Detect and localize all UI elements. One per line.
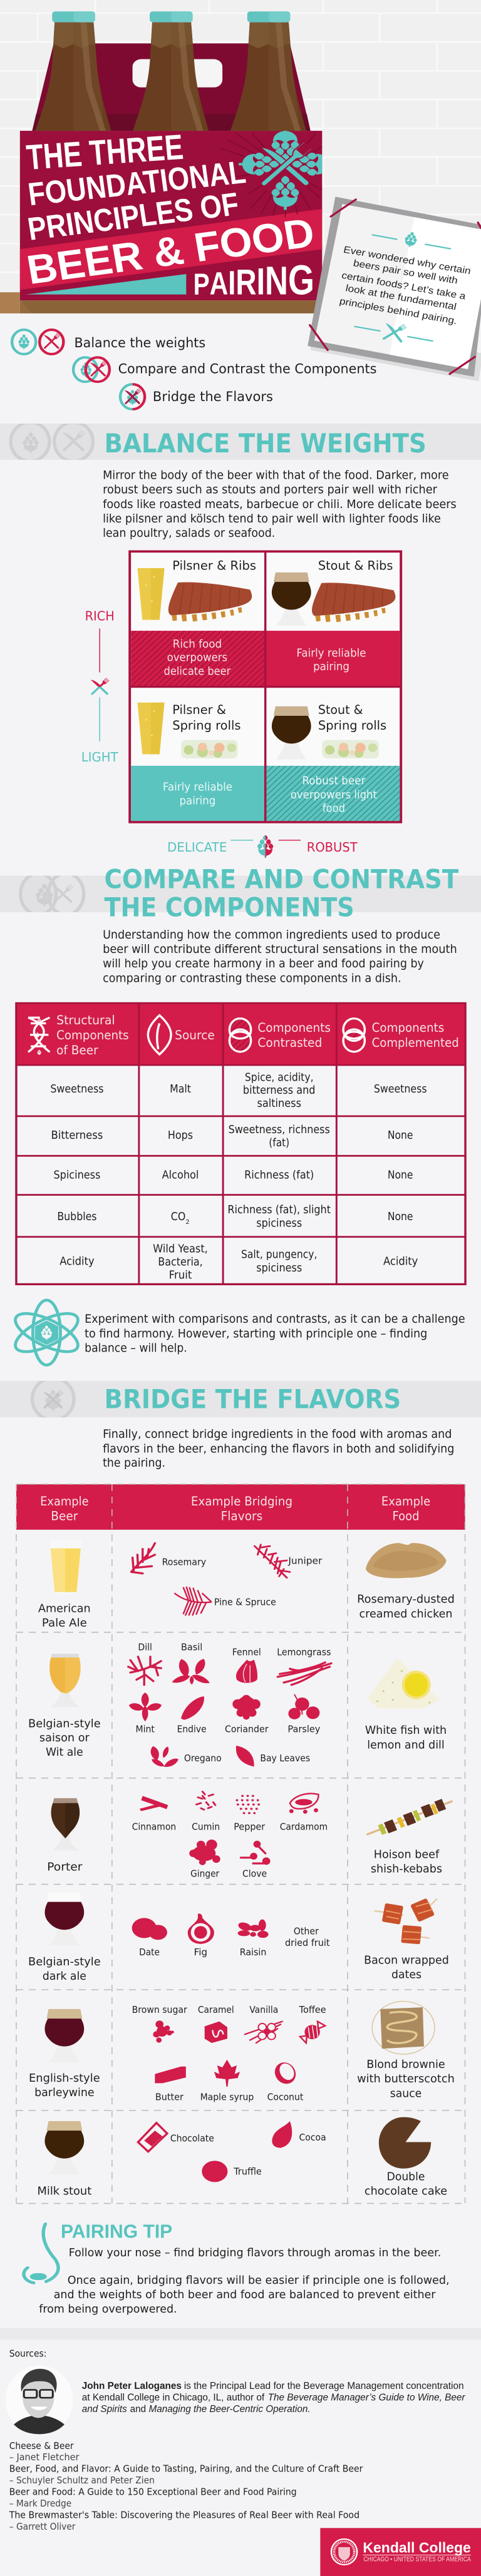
- row: porter: Clove: [242, 1868, 267, 1880]
- row: english barleywine: with butterscotch: [357, 2073, 455, 2085]
- experiment note with atom icon: to find harmony. However, starting with principle one – finding: [85, 1326, 427, 1340]
- row: porter: Porter: [47, 1861, 83, 1873]
- flavors table: [16, 1484, 465, 2204]
- row: acidity: spiciness: [256, 1261, 302, 1275]
- source list: The Brewmaster's Table: Discovering the Pleasures of Real Beer with Real Food: [9, 2509, 359, 2520]
- row: bubbles: [57, 1204, 413, 1229]
- row: bubbles: CO: [171, 1211, 185, 1223]
- row: belgian dark ale: dark ale: [43, 1970, 86, 1983]
- row: milk stout: chocolate cake: [365, 2184, 447, 2197]
- icon: pine and spruce: [175, 1587, 211, 1615]
- table header: Components: [372, 1021, 444, 1035]
- row: bitterness: (fat): [269, 1137, 289, 1149]
- row: belgian saison: Basil: [181, 1642, 202, 1653]
- row: belgian saison: Endive: [177, 1724, 207, 1734]
- icon: mint: [128, 1693, 162, 1721]
- icon: cumin: [196, 1791, 215, 1810]
- icon: oregano: [149, 1745, 180, 1769]
- cell: pilsner and spring rolls: Pilsner &: [172, 703, 226, 717]
- row: belgian dark ale: Other: [294, 1926, 319, 1937]
- principle list: [12, 330, 376, 409]
- heading band: BALANCE THE WEIGHTS: [105, 428, 427, 459]
- table header: Example: [381, 1494, 430, 1509]
- icon: rosemary: [132, 1543, 155, 1574]
- row: bubbles: 2: [185, 1218, 190, 1226]
- glass: pint: [50, 1540, 81, 1594]
- row: belgian saison: Dill: [138, 1642, 152, 1653]
- row: acidity: Salt, pungency,: [241, 1248, 317, 1261]
- cell: stout and ribs: Fairly reliable: [296, 647, 366, 659]
- row: bitterness: Hops: [168, 1129, 193, 1142]
- row: belgian dark ale: [28, 1892, 449, 1983]
- glass: porter tulip: [51, 1798, 80, 1850]
- row: milk stout: Cocoa: [299, 2132, 326, 2143]
- title: BEER & FOOD: [24, 209, 318, 293]
- food: white fish with lemon: [368, 1658, 439, 1708]
- icon: basil: [171, 1657, 211, 1686]
- row: porter: Ginger: [190, 1868, 220, 1880]
- icon: atom: [9, 1300, 84, 1365]
- intro paragraph: robust beers such as stouts and porters pair well with richer: [103, 482, 437, 496]
- row: belgian saison: Coriander: [225, 1724, 269, 1734]
- icon: cardamom: [289, 1793, 318, 1814]
- row: bubbles: spiciness: [256, 1217, 302, 1229]
- row: spiciness: [53, 1169, 413, 1181]
- experiment note with atom icon: balance – will help.: [85, 1341, 187, 1355]
- cell: pilsner and spring rolls: pairing: [180, 795, 215, 807]
- table header: Structural: [56, 1013, 115, 1027]
- source list: – Garrett Oliver: [9, 2520, 76, 2532]
- icon: dna helix: [28, 1017, 49, 1055]
- section 2: compare and contrast: [0, 864, 481, 1284]
- glass: milk stout snifter: [44, 2121, 84, 2174]
- row: bitterness: None: [388, 1129, 413, 1142]
- row: belgian saison: Lemongrass: [277, 1647, 331, 1657]
- footer: [0, 2221, 481, 2576]
- row: spiciness: Alcohol: [162, 1169, 199, 1181]
- source list: – Janet Fletcher: [9, 2451, 79, 2463]
- row: spiciness: Richness (fat): [244, 1169, 314, 1181]
- brick wall: [0, 0, 481, 313]
- row: sweetness: Sweetness: [374, 1083, 427, 1096]
- food: blond brownie: [372, 2002, 435, 2054]
- icon: caramel cube: [205, 2022, 227, 2043]
- icon: coconut: [271, 2059, 299, 2087]
- row: american pale ale: Pale Ale: [42, 1617, 87, 1629]
- icon: brown sugar: [153, 2020, 174, 2043]
- icon: malt grain: [148, 1016, 171, 1054]
- row: english barleywine: Toffee: [299, 2004, 326, 2015]
- intro paragraph: will help you create harmony in a beer and food pairing by: [103, 957, 424, 970]
- row: belgian dark ale: Date: [139, 1947, 160, 1958]
- icon: butter: [155, 2067, 186, 2083]
- row: english barleywine: Coconut: [267, 2092, 303, 2102]
- row: acidity: Acidity: [383, 1255, 418, 1268]
- cell: pilsner and spring rolls: Fairly reliable: [163, 781, 232, 793]
- row: porter: Cardamom: [280, 1821, 328, 1832]
- icon: parsley: [288, 1694, 319, 1719]
- rich axis: RICH: [85, 609, 115, 623]
- intro paragraph: Understanding how the common ingredients used to produce: [103, 928, 440, 942]
- intro paragraph: like pilsner and kölsch tend to pair well with lighter foods like: [103, 512, 441, 526]
- row: sweetness: Sweetness: [50, 1083, 104, 1096]
- author bio: Managing the Beer-Centric Operation.: [149, 2403, 311, 2415]
- icon: maple leaf: [214, 2060, 240, 2087]
- cell: stout and spring rolls: Stout &: [318, 703, 363, 717]
- pairing matrix: [130, 551, 401, 822]
- intro paragraph: [103, 468, 457, 540]
- title: THE THREE: [25, 127, 185, 177]
- row: porter: Cinnamon: [132, 1821, 176, 1832]
- cell: stout and spring rolls: food: [323, 802, 345, 815]
- pinned note card: [308, 196, 481, 381]
- row: belgian saison: Parsley: [287, 1724, 320, 1734]
- cell: stout and spring rolls: overpowers light: [291, 788, 377, 802]
- table header: Example Bridging: [191, 1494, 292, 1509]
- row: milk stout: Truffle: [233, 2166, 262, 2177]
- principle 2: compare and contrast: Compare and Contrast the Components: [118, 362, 376, 377]
- row: belgian dark ale: Raisin: [240, 1947, 266, 1958]
- cell: stout and spring rolls: Spring rolls: [318, 719, 386, 733]
- title: PRINCIPLES OF: [25, 186, 241, 247]
- row: american pale ale: Rosemary-dusted: [357, 1593, 455, 1606]
- row: english barleywine: Vanilla: [249, 2004, 278, 2015]
- author portrait: [6, 2366, 73, 2435]
- row: porter: shish-kebabs: [371, 1863, 442, 1875]
- delicate to robust axis: ROBUST: [307, 840, 358, 855]
- section 3: bridge the flavors: [0, 1300, 481, 1470]
- pairing tip: from being overpowered.: [39, 2302, 177, 2315]
- row: belgian saison: Belgian-style: [28, 1718, 101, 1730]
- row: milk stout: Chocolate: [170, 2133, 214, 2144]
- row: american pale ale: American: [38, 1602, 91, 1615]
- title: PAIRING: [194, 257, 314, 304]
- icon: raisin: [237, 1920, 269, 1938]
- icon: cinnamon: [140, 1796, 168, 1811]
- principle 2: compare and contrast: [73, 357, 376, 382]
- source list: – Mark Dredge: [9, 2497, 71, 2509]
- cell: stout and ribs: pairing: [313, 661, 349, 673]
- row: sweetness: Spice, acidity,: [245, 1071, 314, 1084]
- pinned note card: principles behind pairing.: [338, 296, 458, 327]
- row: belgian saison: Bay Leaves: [260, 1753, 310, 1764]
- three beer bottles: [31, 11, 306, 131]
- row: acidity: Bacteria,: [158, 1256, 203, 1268]
- row: english barleywine: Blond brownie: [366, 2059, 445, 2071]
- icon: fennel: [236, 1659, 257, 1683]
- principle 1: balance: Balance the weights: [75, 335, 205, 351]
- table header: [17, 1004, 465, 1065]
- row: porter: Cumin: [192, 1821, 220, 1832]
- pinned note card: look at the fundamental: [344, 283, 457, 312]
- heading band: THE COMPONENTS: [105, 892, 354, 923]
- row: english barleywine: Brown sugar: [132, 2004, 187, 2015]
- food: bacon wrapped dates: [375, 1898, 437, 1944]
- row: acidity: Fruit: [169, 1269, 192, 1281]
- row: english barleywine: Maple syrup: [200, 2092, 254, 2102]
- cell: pilsner and ribs: Pilsner & Ribs: [172, 559, 256, 573]
- rich axis: LIGHT: [81, 750, 118, 765]
- carrier back with handle: [32, 43, 311, 131]
- divider band: [0, 2328, 481, 2339]
- table header: Beer: [51, 1509, 78, 1523]
- row: bitterness: [51, 1123, 413, 1149]
- title: [24, 127, 318, 304]
- source list: Beer, Food, and Flavor: A Guide to Tasting, Pairing, and the Culture of Craft Beer: [9, 2463, 363, 2474]
- row: spiciness: Spiciness: [53, 1169, 100, 1181]
- row: milk stout: Milk stout: [38, 2184, 91, 2197]
- table header: of Beer: [56, 1044, 98, 1057]
- heading band: [0, 868, 481, 917]
- cell: pilsner and ribs: [131, 559, 265, 686]
- intro paragraph: lean poultry, salads or seafood.: [103, 526, 275, 540]
- sources label: Sources:: [9, 2348, 46, 2359]
- kendall college logo: [320, 2528, 481, 2576]
- icon: chocolate: [138, 2123, 167, 2152]
- icon: dill: [128, 1657, 161, 1685]
- food: kebab: [366, 1799, 452, 1835]
- icon: date: [132, 1918, 167, 1940]
- heading band: [0, 422, 481, 461]
- row: american pale ale: Juniper: [287, 1555, 323, 1566]
- row: bubbles: Richness (fat), slight: [227, 1204, 331, 1216]
- table header: Contrasted: [257, 1036, 322, 1050]
- row: acidity: Acidity: [59, 1255, 95, 1268]
- icon: truffle: [202, 2161, 227, 2182]
- cell: pilsner and ribs: delicate beer: [164, 665, 231, 678]
- source list: Beer and Food: A Guide to 150 Exceptional Beer and Food Pairing: [9, 2486, 297, 2497]
- row: sweetness: Malt: [170, 1083, 191, 1096]
- author bio: [82, 2380, 466, 2415]
- source list: – Schuyler Schultz and Peter Zien: [9, 2474, 155, 2486]
- icon: contrasted circles: [229, 1019, 251, 1052]
- glass: barleywine snifter: [44, 2009, 84, 2062]
- table header: Food: [392, 1509, 420, 1523]
- row: american pale ale: Pine & Spruce: [214, 1597, 276, 1607]
- table header: Complemented: [372, 1036, 459, 1050]
- icon: pepper: [237, 1796, 262, 1813]
- principle 3: bridge: Bridge the Flavors: [153, 389, 273, 405]
- icon: bay leaf: [236, 1746, 254, 1766]
- icon: vanilla: [245, 2022, 282, 2043]
- intro paragraph: [103, 1427, 454, 1470]
- heading band: BRIDGE THE FLAVORS: [105, 1384, 401, 1415]
- row: bubbles: None: [388, 1211, 413, 1223]
- cell: stout and ribs: Stout & Ribs: [318, 559, 393, 573]
- row: belgian saison: saison or: [39, 1731, 90, 1744]
- cell: stout and spring rolls: Robust beer: [302, 775, 366, 788]
- row: english barleywine: Caramel: [198, 2004, 234, 2015]
- table header: Flavors: [221, 1509, 262, 1523]
- row: belgian saison: Fennel: [232, 1647, 261, 1657]
- row: acidity: Wild Yeast,: [153, 1243, 208, 1255]
- glass: tulip: [49, 1654, 81, 1707]
- row: american pale ale: [38, 1540, 455, 1629]
- section 1: balance the weights: [0, 422, 481, 858]
- icon: complemented circles: [343, 1019, 365, 1052]
- row: sweetness: saltiness: [257, 1097, 301, 1110]
- cell: pilsner and spring rolls: [131, 695, 265, 821]
- pinned note card: beers pair so well with: [352, 258, 458, 286]
- cell: pilsner and spring rolls: Spring rolls: [172, 719, 240, 733]
- row: belgian saison: White fish with: [365, 1724, 447, 1737]
- icon: nose: [24, 2224, 58, 2283]
- cell: pilsner and ribs: Rich food: [173, 638, 222, 651]
- row: english barleywine: barleywine: [34, 2087, 95, 2099]
- cell: pilsner and ribs: overpowers: [167, 651, 227, 664]
- cell: stout and spring rolls: [266, 703, 400, 821]
- row: american pale ale: Rosemary: [162, 1557, 206, 1568]
- row: belgian dark ale: dried fruit: [285, 1937, 330, 1948]
- glass: dark ale snifter: [44, 1892, 84, 1945]
- row: belgian dark ale: Fig: [194, 1947, 207, 1958]
- icon: clove: [240, 1841, 271, 1865]
- author bio: and Spirits: [82, 2403, 127, 2415]
- source list: [9, 2440, 363, 2532]
- icon: endive: [181, 1696, 204, 1720]
- row: belgian dark ale: dates: [391, 1968, 422, 1981]
- author bio: John Peter Laloganes: [82, 2380, 182, 2391]
- row: english barleywine: Butter: [155, 2092, 184, 2102]
- cell: stout and ribs: [266, 559, 400, 686]
- row: porter: Pepper: [234, 1821, 266, 1832]
- rich axis: [81, 609, 118, 765]
- food: chicken: [366, 1543, 447, 1578]
- source list: Cheese & Beer: [9, 2440, 74, 2451]
- table header: Components: [56, 1029, 129, 1042]
- icon: lemongrass: [277, 1662, 331, 1685]
- row: bitterness: Bitterness: [51, 1129, 103, 1142]
- intro paragraph: comparing or contrasting these components in a dish.: [103, 971, 401, 985]
- row: belgian saison: lemon and dill: [367, 1739, 445, 1751]
- pairing tip: [24, 2221, 450, 2315]
- delicate to robust axis: [167, 835, 358, 858]
- row: acidity: [59, 1243, 418, 1281]
- carrier front panel: [20, 131, 322, 300]
- row: english barleywine: English-style: [29, 2072, 100, 2085]
- food: double chocolate cake: [379, 2117, 431, 2169]
- row: belgian saison: Wit ale: [46, 1746, 83, 1759]
- row: belgian saison: Mint: [135, 1724, 155, 1734]
- pinned note card: certain foods? Let’s take a: [341, 270, 467, 302]
- row: english barleywine: sauce: [390, 2087, 422, 2100]
- row: american pale ale: creamed chicken: [359, 1607, 452, 1621]
- row: bubbles: Bubbles: [57, 1211, 97, 1223]
- heading band: [0, 1381, 481, 1418]
- row: porter: [47, 1791, 452, 1880]
- icon: juniper: [255, 1545, 290, 1577]
- principle 3: bridge: [120, 384, 273, 409]
- emblem: hops with crossed knife and fork: [220, 131, 322, 217]
- intro paragraph: [103, 928, 457, 985]
- author bio: and: [130, 2403, 146, 2415]
- row: bitterness: Sweetness, richness: [229, 1123, 330, 1136]
- shelf: [0, 292, 316, 313]
- title: FOUNDATIONAL: [26, 154, 248, 212]
- row: milk stout: Double: [387, 2170, 425, 2183]
- intro paragraph: the pairing.: [103, 1456, 165, 1470]
- icon: fig: [188, 1913, 214, 1944]
- row: milk stout: [38, 2117, 447, 2197]
- author bio: at Kendall College in Chicago, IL, author of: [82, 2392, 264, 2403]
- row: porter: Hoison beef: [374, 1848, 440, 1861]
- table header: Example: [40, 1494, 89, 1509]
- icon: toffee: [300, 2022, 325, 2043]
- row: belgian saison: [28, 1642, 447, 1769]
- pinned note card: Ever wondered why certain: [343, 244, 472, 277]
- principle 1: balance: [12, 330, 205, 354]
- delicate to robust axis: DELICATE: [167, 840, 227, 855]
- table header: Components: [257, 1021, 331, 1035]
- row: english barleywine: [29, 2002, 455, 2102]
- table header: [16, 1484, 465, 1530]
- icon: cocoa pod: [272, 2121, 292, 2148]
- components table: [16, 1003, 465, 1284]
- row: sweetness: [50, 1071, 427, 1110]
- row: belgian saison: Oregano: [184, 1753, 222, 1764]
- experiment note with atom icon: [9, 1300, 465, 1365]
- row: sweetness: bitterness and: [243, 1084, 316, 1097]
- hero: six-pack carrier with title: [0, 11, 481, 409]
- pairing tip: PAIRING TIP: [61, 2221, 172, 2242]
- row: spiciness: None: [388, 1169, 413, 1181]
- table header: Source: [175, 1029, 215, 1042]
- row: belgian dark ale: Bacon wrapped: [364, 1954, 449, 1967]
- row: belgian dark ale: Belgian-style: [28, 1956, 101, 1968]
- icon: ginger: [189, 1840, 220, 1865]
- icon: coriander: [232, 1695, 261, 1719]
